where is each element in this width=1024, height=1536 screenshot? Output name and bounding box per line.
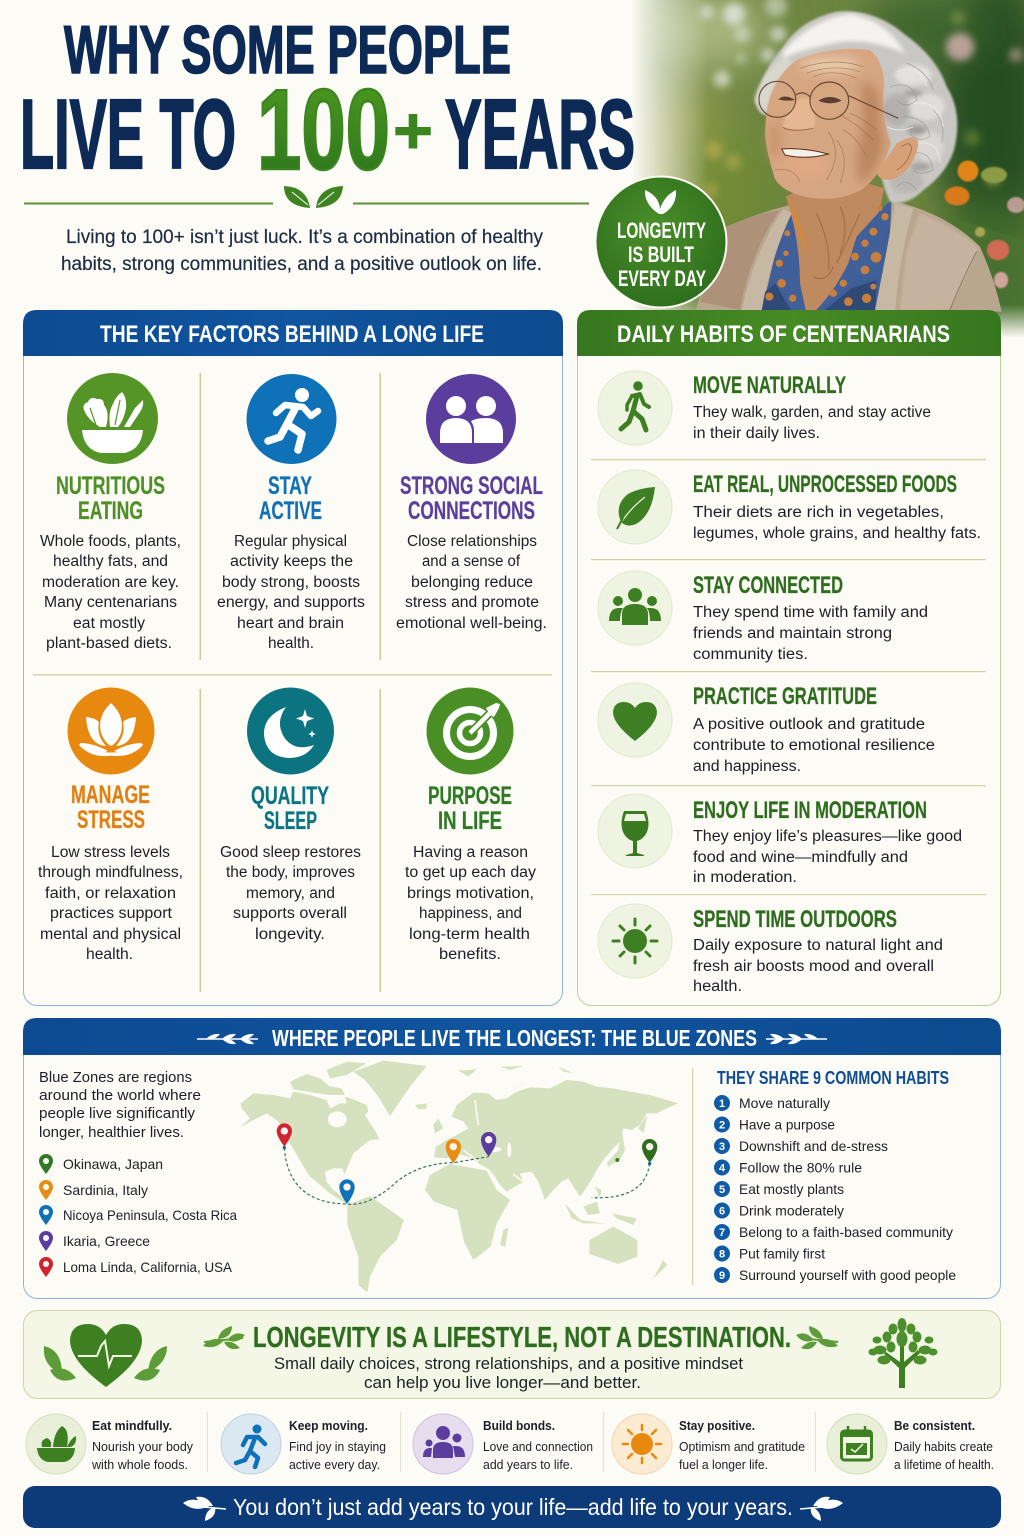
icon: group of people — [598, 571, 672, 645]
factor: nutritious eating — [40, 373, 181, 652]
factor: nutritious eating: plant-based diets. — [46, 635, 172, 652]
factor: strong social connections: CONNECTIONS — [408, 497, 535, 525]
icon: people — [413, 1414, 473, 1474]
panel: daily habits — [577, 310, 1001, 1006]
factor: manage stress: practices support — [50, 905, 173, 922]
habit: practice gratitude: and happiness. — [693, 758, 801, 775]
key factors header — [23, 310, 563, 356]
habit: practice gratitude: contribute to emotional resilience — [693, 737, 935, 754]
title divider with leaves — [24, 186, 589, 208]
habit list: Surround yourself with good people — [739, 1267, 956, 1283]
factor: manage stress: Low stress levels — [51, 844, 170, 861]
factor: nutritious eating: healthy fats, and — [53, 553, 168, 570]
footer banner — [23, 1486, 1001, 1528]
cardigan bands — [742, 209, 792, 311]
title: LIVE TO — [20, 79, 236, 189]
icon: runner — [221, 1414, 281, 1474]
icon: moon and stars — [247, 688, 334, 774]
banner: longevity is a lifestyle: Small daily choices, strong relationships, and a positive mindset — [274, 1355, 743, 1373]
factor: manage stress: through mindfulness, — [38, 864, 183, 881]
factor: strong social connections: stress and promote — [405, 594, 539, 611]
habit list: Drink moderately — [739, 1202, 844, 1218]
factor: manage stress: faith, or relaxation — [45, 885, 176, 902]
tip: stay positive: fuel a longer life. — [679, 1457, 768, 1472]
habit: practice gratitude: PRACTICE GRATITUDE — [693, 683, 877, 710]
tip: be consistent — [827, 1414, 994, 1474]
banner: longevity is a lifestyle — [24, 1310, 1000, 1398]
banner: longevity is a lifestyle: LONGEVITY IS A LIFESTYLE, NOT A DESTINATION. — [253, 1322, 791, 1354]
legend: Ikaria: Ikaria, Greece — [63, 1233, 150, 1249]
sprig right — [800, 1497, 843, 1521]
daily habits header — [577, 310, 1001, 356]
habit list — [714, 1095, 956, 1283]
panel: daily habits: DAILY HABITS OF CENTENARIANS — [617, 321, 950, 348]
intro text: habits, strong communities, and a positive outlook on life. — [61, 254, 542, 275]
icon: salad bowl — [67, 373, 158, 464]
legend: Nicoya: Nicoya Peninsula, Costa Rica — [63, 1207, 237, 1223]
factor: nutritious eating: Many centenarians — [44, 594, 177, 611]
factor: strong social connections — [396, 374, 547, 632]
eyes — [778, 96, 842, 103]
hair base — [755, 11, 957, 203]
intro text: Living to 100+ isn’t just luck. It’s a combination of healthy — [66, 227, 543, 248]
pin: Loma Linda — [277, 1123, 292, 1147]
icon: runner — [246, 374, 336, 464]
factor: stay active: STAY — [268, 472, 312, 500]
legend: Okinawa: Okinawa, Japan — [63, 1156, 163, 1172]
factor: strong social connections: STRONG SOCIAL — [400, 472, 543, 500]
flourish left — [197, 1034, 258, 1044]
factor: quality sleep: longevity. — [255, 926, 325, 943]
blue zones header — [23, 1018, 1001, 1055]
hero photo: smiling centenarian in garden — [636, 0, 1024, 336]
nine common habits: THEY SHARE 9 COMMON HABITS — [717, 1068, 949, 1088]
tip: eat mindfully: Eat mindfully. — [92, 1418, 172, 1433]
habit list: 9 — [719, 1270, 725, 1282]
tip: build bonds: Build bonds. — [483, 1418, 555, 1433]
habit list: Eat mostly plants — [739, 1181, 844, 1197]
badge: longevity is built every day: EVERY DAY — [618, 266, 706, 291]
habit list: 2 — [719, 1120, 725, 1132]
world map — [240, 1061, 678, 1292]
factor: strong social connections: Close relationships — [407, 533, 537, 550]
factor: nutritious eating: eat mostly — [73, 615, 145, 632]
factor: nutritious eating: EATING — [78, 497, 143, 525]
tip: be consistent: Daily habits create — [894, 1439, 993, 1454]
habit: spend time outdoors: fresh air boosts mood and overall — [693, 958, 934, 975]
icon: heart — [598, 683, 672, 757]
habit: practice gratitude — [598, 683, 935, 775]
blue zones description: people live significantly — [39, 1106, 196, 1122]
factor: stay active: body strong, boosts — [222, 574, 360, 591]
tip: keep moving: Keep moving. — [289, 1418, 368, 1433]
factor: manage stress: health. — [86, 946, 133, 963]
habit: eat real foods: Their diets are rich in vegetables, — [693, 504, 944, 521]
factor: manage stress: mental and physical — [40, 926, 181, 943]
icon: walker — [598, 371, 672, 445]
tip: be consistent: Be consistent. — [894, 1418, 975, 1433]
tip: stay positive: Optimism and gratitude — [679, 1439, 805, 1454]
factor: manage stress: STRESS — [77, 806, 145, 834]
habit: spend time outdoors: Daily exposure to natural light and — [693, 937, 943, 954]
blue zones description: Blue Zones are regions — [39, 1070, 192, 1086]
sprig right — [796, 1326, 838, 1349]
habit: stay connected: STAY CONNECTED — [693, 572, 843, 599]
factor: quality sleep: SLEEP — [264, 807, 317, 835]
tip: stay positive: Stay positive. — [679, 1418, 755, 1433]
intro text — [61, 227, 543, 275]
habit: spend time outdoors: SPEND TIME OUTDOORS — [693, 906, 897, 933]
pin: Ikaria — [481, 1132, 496, 1157]
habit: eat real foods — [598, 470, 981, 544]
title: + — [393, 93, 433, 167]
blue zones description: around the world where — [39, 1088, 201, 1104]
flourish right — [766, 1034, 827, 1044]
factor: quality sleep: the body, improves — [226, 864, 355, 881]
woman — [695, 11, 1002, 312]
tip: eat mindfully: with whole foods. — [91, 1457, 188, 1472]
tip: stay positive — [612, 1414, 805, 1474]
nine common habits — [714, 1068, 956, 1283]
factor: quality sleep: Good sleep restores — [220, 844, 361, 861]
cardigan — [695, 200, 1002, 312]
factor: purpose in life: happiness, and — [419, 905, 522, 922]
habit list: Follow the 80% rule — [739, 1160, 862, 1176]
habit: spend time outdoors — [598, 904, 943, 995]
tips row — [26, 1412, 994, 1474]
factor: strong social connections: emotional well-being. — [396, 615, 547, 632]
icon: target with arrow — [426, 688, 514, 774]
factor: purpose in life: long-term health — [409, 926, 530, 943]
tip: build bonds: Love and connection — [483, 1439, 593, 1454]
icon: two people — [426, 374, 516, 464]
habit: eat real foods: legumes, whole grains, and healthy fats. — [693, 525, 981, 542]
icon: bowl — [26, 1414, 86, 1474]
tip: build bonds: add years to life. — [483, 1457, 573, 1472]
factor: stay active: Regular physical — [234, 533, 347, 550]
habit: move naturally: They walk, garden, and stay active — [693, 404, 931, 421]
habit list: 6 — [719, 1206, 725, 1218]
tip: be consistent: a lifetime of health. — [894, 1457, 994, 1472]
factor: purpose in life: to get up each day — [405, 864, 536, 881]
flowers — [944, 160, 1024, 290]
banner: longevity is a lifestyle: can help you live longer—and better. — [364, 1374, 641, 1392]
tip: keep moving: active every day. — [289, 1457, 380, 1472]
pin: Okinawa — [642, 1139, 657, 1163]
pin: Sardinia — [446, 1139, 461, 1163]
factor: stay active: health. — [268, 635, 314, 652]
tip: keep moving: Find joy in staying — [289, 1439, 386, 1454]
tip: eat mindfully — [26, 1414, 193, 1474]
factor: quality sleep — [220, 688, 361, 943]
title: WHY SOME PEOPLE — [64, 12, 511, 88]
habit: enjoy life in moderation — [598, 794, 962, 886]
glasses — [759, 81, 898, 119]
neck — [786, 181, 884, 312]
factor: quality sleep: supports overall — [233, 905, 347, 922]
factor: purpose in life: PURPOSE — [428, 782, 512, 810]
panel: blue zones: WHERE PEOPLE LIVE THE LONGEST: THE BLUE ZONES — [272, 1025, 757, 1051]
habit list: Move naturally — [739, 1095, 830, 1111]
habit list: 8 — [719, 1248, 725, 1260]
icon: lotus — [68, 688, 154, 774]
factor: stay active: activity keeps the — [230, 553, 353, 570]
factor: nutritious eating: Whole foods, plants, — [40, 533, 181, 550]
factor: nutritious eating: moderation are key. — [42, 574, 179, 591]
collars — [800, 280, 801, 288]
habit list: Have a purpose — [739, 1116, 835, 1132]
legend: Okinawa — [39, 1154, 163, 1174]
panel: key factors — [23, 310, 563, 1006]
factor: manage stress — [38, 688, 183, 963]
legend: Sardinia — [39, 1180, 148, 1200]
factor: quality sleep: QUALITY — [251, 782, 329, 810]
habit list: 7 — [719, 1227, 725, 1239]
habit list: 1 — [719, 1098, 725, 1110]
habit list: Put family first — [739, 1246, 825, 1262]
panel: blue zones — [23, 1018, 1001, 1298]
habit: spend time outdoors: health. — [693, 978, 742, 995]
badge: longevity is built every day: IS BUILT — [628, 242, 694, 267]
habit: stay connected: friends and maintain strong — [693, 625, 892, 642]
habit: enjoy life in moderation: in moderation. — [693, 869, 797, 886]
legend: Nicoya — [39, 1205, 237, 1225]
icon: leaf — [598, 470, 672, 544]
factor: purpose in life: Having a reason — [413, 844, 528, 861]
factor: stay active: ACTIVE — [259, 497, 322, 525]
factor: stay active: heart and brain — [237, 615, 344, 632]
factor: strong social connections: belonging reduce — [411, 574, 533, 591]
habit: move naturally: in their daily lives. — [693, 425, 820, 442]
habit list: 4 — [719, 1162, 726, 1174]
tip: keep moving — [221, 1414, 386, 1474]
icon: tree — [868, 1318, 938, 1388]
factor: purpose in life: IN LIFE — [438, 807, 502, 835]
habit list: Downshift and de-stress — [739, 1138, 888, 1154]
blue zones description: longer, healthier lives. — [39, 1125, 184, 1141]
factor: nutritious eating: NUTRITIOUS — [56, 472, 165, 500]
footer banner: You don’t just add years to your life—add life to your years. — [233, 1494, 793, 1520]
habit: enjoy life in moderation: ENJOY LIFE IN MODERATION — [693, 797, 927, 824]
badge: longevity is built every day — [596, 176, 726, 308]
title: YEARS — [445, 79, 635, 189]
legend: Loma Linda: Loma Linda, California, USA — [63, 1259, 233, 1275]
panel: key factors: THE KEY FACTORS BEHIND A LONG LIFE — [100, 321, 484, 348]
factor: strong social connections: and a sense of — [422, 553, 521, 570]
sprig left — [203, 1326, 245, 1349]
icon: white leaf — [645, 190, 676, 214]
icon: sun — [612, 1414, 672, 1474]
habit list: 3 — [719, 1141, 725, 1153]
legend: Ikaria — [39, 1231, 150, 1251]
badge: longevity is built every day: LONGEVITY — [617, 218, 706, 243]
mouth — [782, 149, 828, 157]
icon: calendar with check — [827, 1414, 887, 1474]
icon: heart with pulse and leaves — [44, 1324, 167, 1387]
tip: eat mindfully: Nourish your body — [92, 1439, 193, 1454]
factor: purpose in life — [405, 688, 536, 963]
legend: Loma Linda — [39, 1257, 233, 1277]
icon: wine glass — [598, 794, 672, 868]
wrinkles — [775, 62, 877, 183]
factor: purpose in life: brings motivation, — [407, 885, 534, 902]
legend: Sardinia: Sardinia, Italy — [63, 1182, 148, 1198]
blue zones description — [39, 1070, 201, 1141]
habit: enjoy life in moderation: food and wine—mindfully and — [693, 849, 908, 866]
habit: stay connected: They spend time with family and — [693, 604, 928, 621]
habit: stay connected — [598, 571, 928, 663]
factor: stay active: energy, and supports — [217, 594, 365, 611]
habit: move naturally: MOVE NATURALLY — [693, 372, 846, 399]
factor: purpose in life: benefits. — [439, 946, 501, 963]
pin: Nicoya — [339, 1179, 355, 1204]
habit list: 5 — [719, 1184, 725, 1196]
title — [20, 12, 635, 194]
nose — [783, 98, 815, 130]
title: 100 — [257, 67, 390, 194]
shirt — [762, 200, 892, 312]
factor: manage stress: MANAGE — [71, 781, 150, 809]
factor: stay active — [217, 374, 365, 652]
habit: enjoy life in moderation: They enjoy life’s pleasures—like good — [693, 828, 962, 845]
habit: stay connected: community ties. — [693, 646, 808, 663]
ear — [877, 137, 918, 180]
tip: build bonds — [413, 1414, 593, 1474]
habit: move naturally — [598, 371, 931, 445]
habit: practice gratitude: A positive outlook and gratitude — [693, 716, 925, 733]
habit list: Belong to a faith-based community — [739, 1224, 953, 1240]
face — [765, 49, 891, 199]
map legend — [39, 1154, 237, 1277]
icon: sun — [598, 904, 672, 978]
factor: quality sleep: memory, and — [246, 885, 335, 902]
dashed route — [284, 1148, 650, 1204]
sprig left — [183, 1497, 226, 1521]
